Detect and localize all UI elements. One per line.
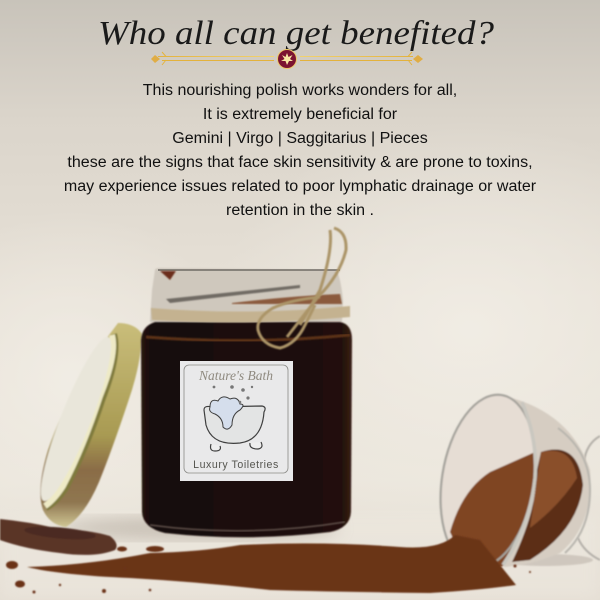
glass bowl with powder — [429, 388, 593, 575]
twine wrap — [151, 306, 350, 322]
shadow under jar and lid — [60, 516, 340, 540]
icon: bathtub with bubbles — [204, 385, 265, 451]
body text: Gemini | Virgo | Saggitarius | Pieces — [172, 129, 428, 147]
body text — [64, 81, 536, 219]
jar neck glass — [150, 268, 343, 322]
jar lid — [30, 323, 142, 527]
jar — [141, 228, 352, 537]
jar body — [141, 322, 352, 537]
ornamental divider — [151, 50, 423, 68]
product label — [180, 361, 293, 481]
body text: these are the signs that face skin sensitivity & are prone to toxins, — [67, 153, 533, 171]
label tagline: Luxury Toiletries — [193, 459, 279, 471]
body text: retention in the skin . — [226, 201, 374, 219]
wooden spoon — [0, 519, 117, 555]
body text: may experience issues related to poor lymphatic drainage or water — [64, 177, 536, 195]
far right glass bowl — [578, 436, 600, 560]
body text: This nourishing polish works wonders for all, — [143, 81, 457, 99]
body text: It is extremely beneficial for — [203, 105, 397, 123]
label brand text: Nature's Bath — [198, 368, 273, 383]
coffee powder spill — [6, 535, 531, 594]
twine bow — [258, 228, 346, 348]
title: Who all can get benefited? — [98, 15, 494, 52]
